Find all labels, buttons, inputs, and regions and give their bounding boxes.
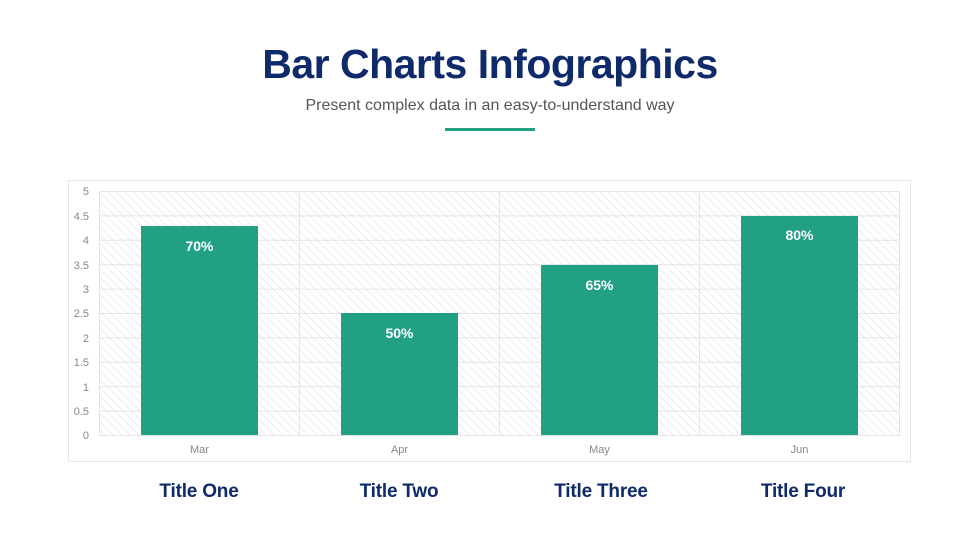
category titles: Title Two bbox=[360, 481, 438, 502]
bar chart: 4 bbox=[83, 235, 89, 247]
bar chart: 0 bbox=[83, 430, 89, 442]
bar chart: 5 bbox=[83, 186, 89, 198]
bar chart: 65% bbox=[585, 277, 614, 293]
subtitle: Present complex data in an easy-to-understand way bbox=[305, 97, 675, 114]
bar chart: 1.5 bbox=[74, 357, 89, 369]
bar chart: 70% bbox=[185, 238, 214, 254]
bar chart: Jun bbox=[791, 444, 808, 456]
bar chart: 50% bbox=[385, 325, 414, 341]
bar chart: 2 bbox=[83, 333, 89, 345]
category titles bbox=[159, 481, 845, 502]
title: Bar Charts Infographics bbox=[262, 41, 718, 87]
category titles: Title One bbox=[159, 481, 239, 502]
bar chart: 1 bbox=[83, 382, 89, 394]
accent line bbox=[445, 128, 535, 131]
bar chart: May bbox=[589, 444, 610, 456]
bar chart: Apr bbox=[391, 444, 408, 456]
bar chart: Mar bbox=[190, 444, 209, 456]
bar chart: 0.5 bbox=[74, 406, 89, 418]
category titles: Title Four bbox=[761, 481, 845, 502]
category titles: Title Three bbox=[554, 481, 648, 502]
bar chart: 3 bbox=[83, 284, 89, 296]
bar chart: 3.5 bbox=[74, 260, 89, 272]
bar chart: 2.5 bbox=[74, 308, 89, 320]
bar chart: 4.5 bbox=[74, 211, 89, 223]
bar chart: 80% bbox=[785, 227, 814, 243]
